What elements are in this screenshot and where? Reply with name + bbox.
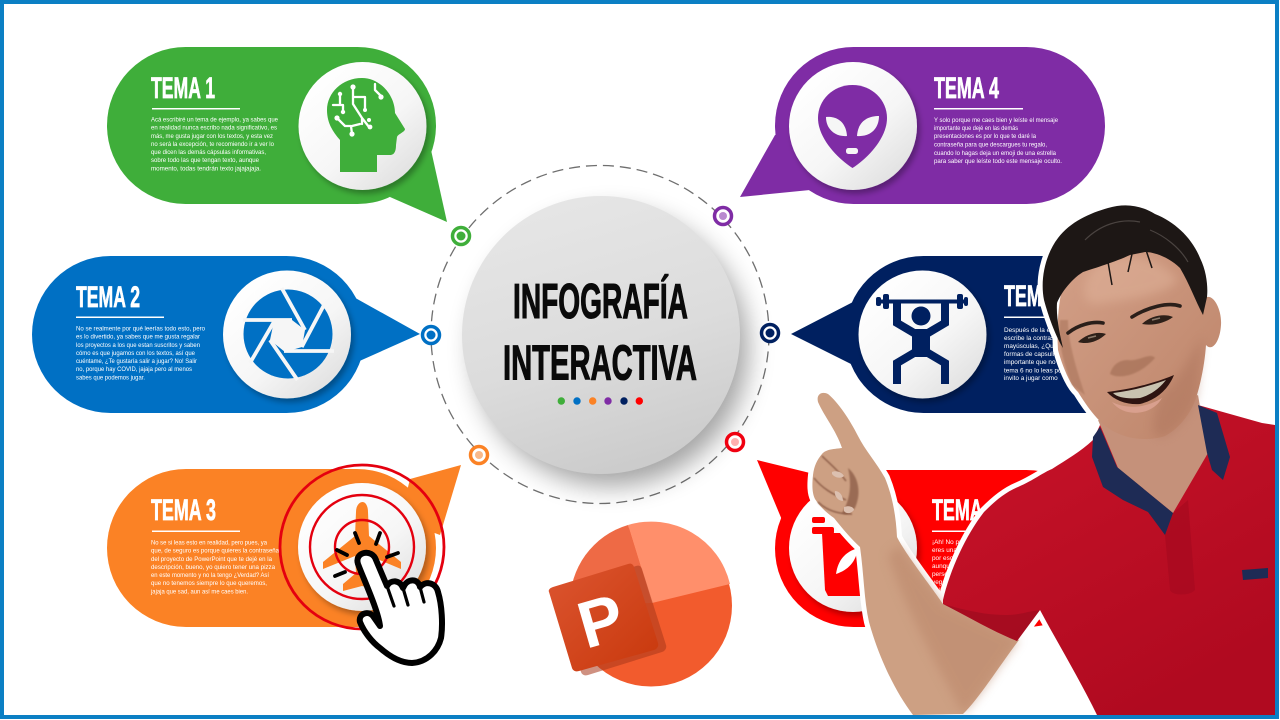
divider line (76, 316, 164, 318)
arm and hand (812, 393, 1019, 715)
heading: tema 4: TEMA 4 (934, 72, 999, 105)
title: INTERACTIVA (503, 336, 697, 390)
text block: tema 2: cuéntame, ¿Te gustaría salir a jugar? No! Salir (76, 358, 198, 365)
text block: tema 1 (151, 116, 278, 172)
text block: tema 2: es lo divertido, ya sabes que me gusta regalar (76, 334, 201, 341)
heading: tema 5: TEMA 5 (1004, 280, 1069, 313)
text block: tema 4: importante que dejé en las demás (934, 125, 1018, 132)
panel: tema 1 (107, 47, 447, 222)
heading: tema 3: TEMA 3 (151, 494, 216, 527)
text block: tema 4: Y solo porque me caes bien y leíste el mensaje (934, 117, 1058, 124)
panel: tema 3 (107, 465, 461, 627)
text block: tema 5 (1004, 327, 1079, 382)
divider line (152, 530, 240, 532)
text block: tema 1: en realidad nunca escribo nada significativo, es (151, 125, 277, 132)
text block: tema 1: que dicen las demás cápsulas informativas, (151, 149, 266, 156)
text block: tema 5: formas de capsulitas (1004, 351, 1063, 358)
icon: camera aperture (223, 270, 351, 398)
panel: tema 6 (757, 460, 1105, 627)
dashed ring (431, 166, 769, 504)
text block: tema 3: No se si leas esto en realidad, pero pues, ya (151, 540, 267, 546)
text block: tema 5: escribe la contraseña (1004, 335, 1065, 342)
text block: tema 6: aunque (932, 563, 954, 570)
nose (1110, 356, 1155, 376)
icon: weightlifter (858, 270, 986, 398)
text block: tema 2: los proyectos a los que estan suscritos y saben (76, 342, 200, 349)
text block: tema 5: mayúsculas, ¿Quedó (1004, 343, 1065, 350)
text block: tema 3 (150, 540, 279, 595)
divider line (934, 108, 1023, 110)
text block: tema 5: invito a jugar como (1004, 375, 1058, 382)
text block: tema 6: ¡Ah! No puedo (932, 539, 974, 546)
text block: tema 3: jajaja que sad, aun así me caes bien. (150, 588, 248, 595)
marker: navy (762, 324, 778, 342)
text block: tema 6: vegana (932, 579, 953, 586)
face (1043, 205, 1221, 439)
text block: tema 3: descripción, bueno, yo quiero tener una pizza (151, 564, 275, 571)
text block: tema 1: no será la excepción, te recomiendo ir a ver lo (151, 141, 274, 148)
text block: tema 5: tema 6 no lo leas porque (1004, 368, 1075, 374)
person pointing (812, 205, 1275, 715)
text block: tema 6: pelo (932, 587, 945, 594)
marker: purple (714, 208, 732, 224)
heading: tema 2: TEMA 2 (76, 281, 140, 314)
text block: tema 2: No se realmente por qué leerías todo esto, pero (76, 326, 205, 332)
text block: tema 5: importante que no (1004, 359, 1056, 366)
eyebrows (1068, 305, 1180, 333)
marker: orange (470, 446, 488, 464)
mouth (1107, 375, 1174, 404)
text block: tema 3: en este momento y no la tengo ¿Verdad? Así (151, 572, 269, 579)
text block: tema 4: contraseña para que descargues tu regalo, (934, 142, 1047, 148)
panel: tema 4 (740, 47, 1105, 204)
divider line (932, 530, 1020, 532)
icon: head with circuits (298, 62, 426, 190)
marker: blue (422, 326, 440, 344)
text block: tema 2: sabes que podemos jugar. (76, 374, 145, 381)
title (503, 275, 697, 390)
shirt (943, 405, 1275, 715)
panel: tema 2 (32, 256, 420, 413)
center circle (462, 196, 748, 486)
title: INFOGRAFÍA (513, 275, 688, 329)
icon: airplane (298, 483, 426, 611)
text block: tema 6: so (932, 595, 939, 602)
text block: tema 1: más, me gusta jugar con los textos, y esta vez (151, 133, 273, 140)
marker: green (452, 228, 470, 244)
text block: tema 6: persona (932, 571, 956, 578)
text block: tema 3: que, de seguro es porque quieres la contraseña (151, 548, 279, 555)
person halo (812, 205, 1275, 715)
text block: tema 2: cómo es que jugamos con los textos, así que (76, 350, 195, 357)
text block: tema 4: para saber que leíste todo este mensaje oculto. (934, 158, 1062, 165)
text block: tema 6: eres una per (932, 547, 969, 554)
neck (1098, 395, 1208, 513)
heading: tema 1: TEMA 1 (151, 72, 215, 105)
colour dots (558, 397, 643, 405)
text block: tema 4: cuando lo hagas deja un emoji de una estrella (934, 150, 1056, 157)
text block: tema 1: sobre todo las que tengan texto, aunque (151, 157, 259, 164)
text block: tema 1: momento, todas tendrán texto jajajajaja. (151, 165, 261, 172)
click rings (280, 465, 444, 629)
text block: tema 6 (932, 539, 974, 602)
eyes (1078, 315, 1173, 343)
text block: tema 3: que no tenemos siempre lo que queremos, (151, 580, 267, 587)
icon: mortar and pestle (789, 484, 917, 612)
text block: tema 6: por eso me (932, 555, 964, 562)
divider line (152, 108, 240, 110)
text block: tema 4: presentaciones es por lo que te daré la (934, 133, 1036, 140)
text block: tema 2 (76, 326, 205, 381)
logo letter: P (569, 579, 632, 662)
collar (1092, 405, 1268, 580)
text block: tema 1: Acá escribiré un tema de ejemplo, ya sabes que (151, 116, 278, 124)
divider line (1004, 316, 1092, 318)
text block: tema 4 (934, 117, 1062, 165)
icon: alien (789, 62, 917, 190)
text block: tema 5: Después de la explicación (1004, 327, 1079, 334)
heading: tema 6: TEMA 6 (932, 494, 997, 527)
hair (1043, 205, 1207, 348)
panel: tema 5 (791, 256, 1180, 413)
text block: tema 2: no, porque hay COVID, jajaja pero al menos (76, 366, 192, 373)
icon: PowerPoint logo (549, 522, 732, 686)
text block: tema 3: del proyecto de PowerPoint que te dejé en la (151, 556, 272, 563)
icon: pointing hand cursor (335, 533, 442, 663)
marker: red (726, 434, 744, 450)
